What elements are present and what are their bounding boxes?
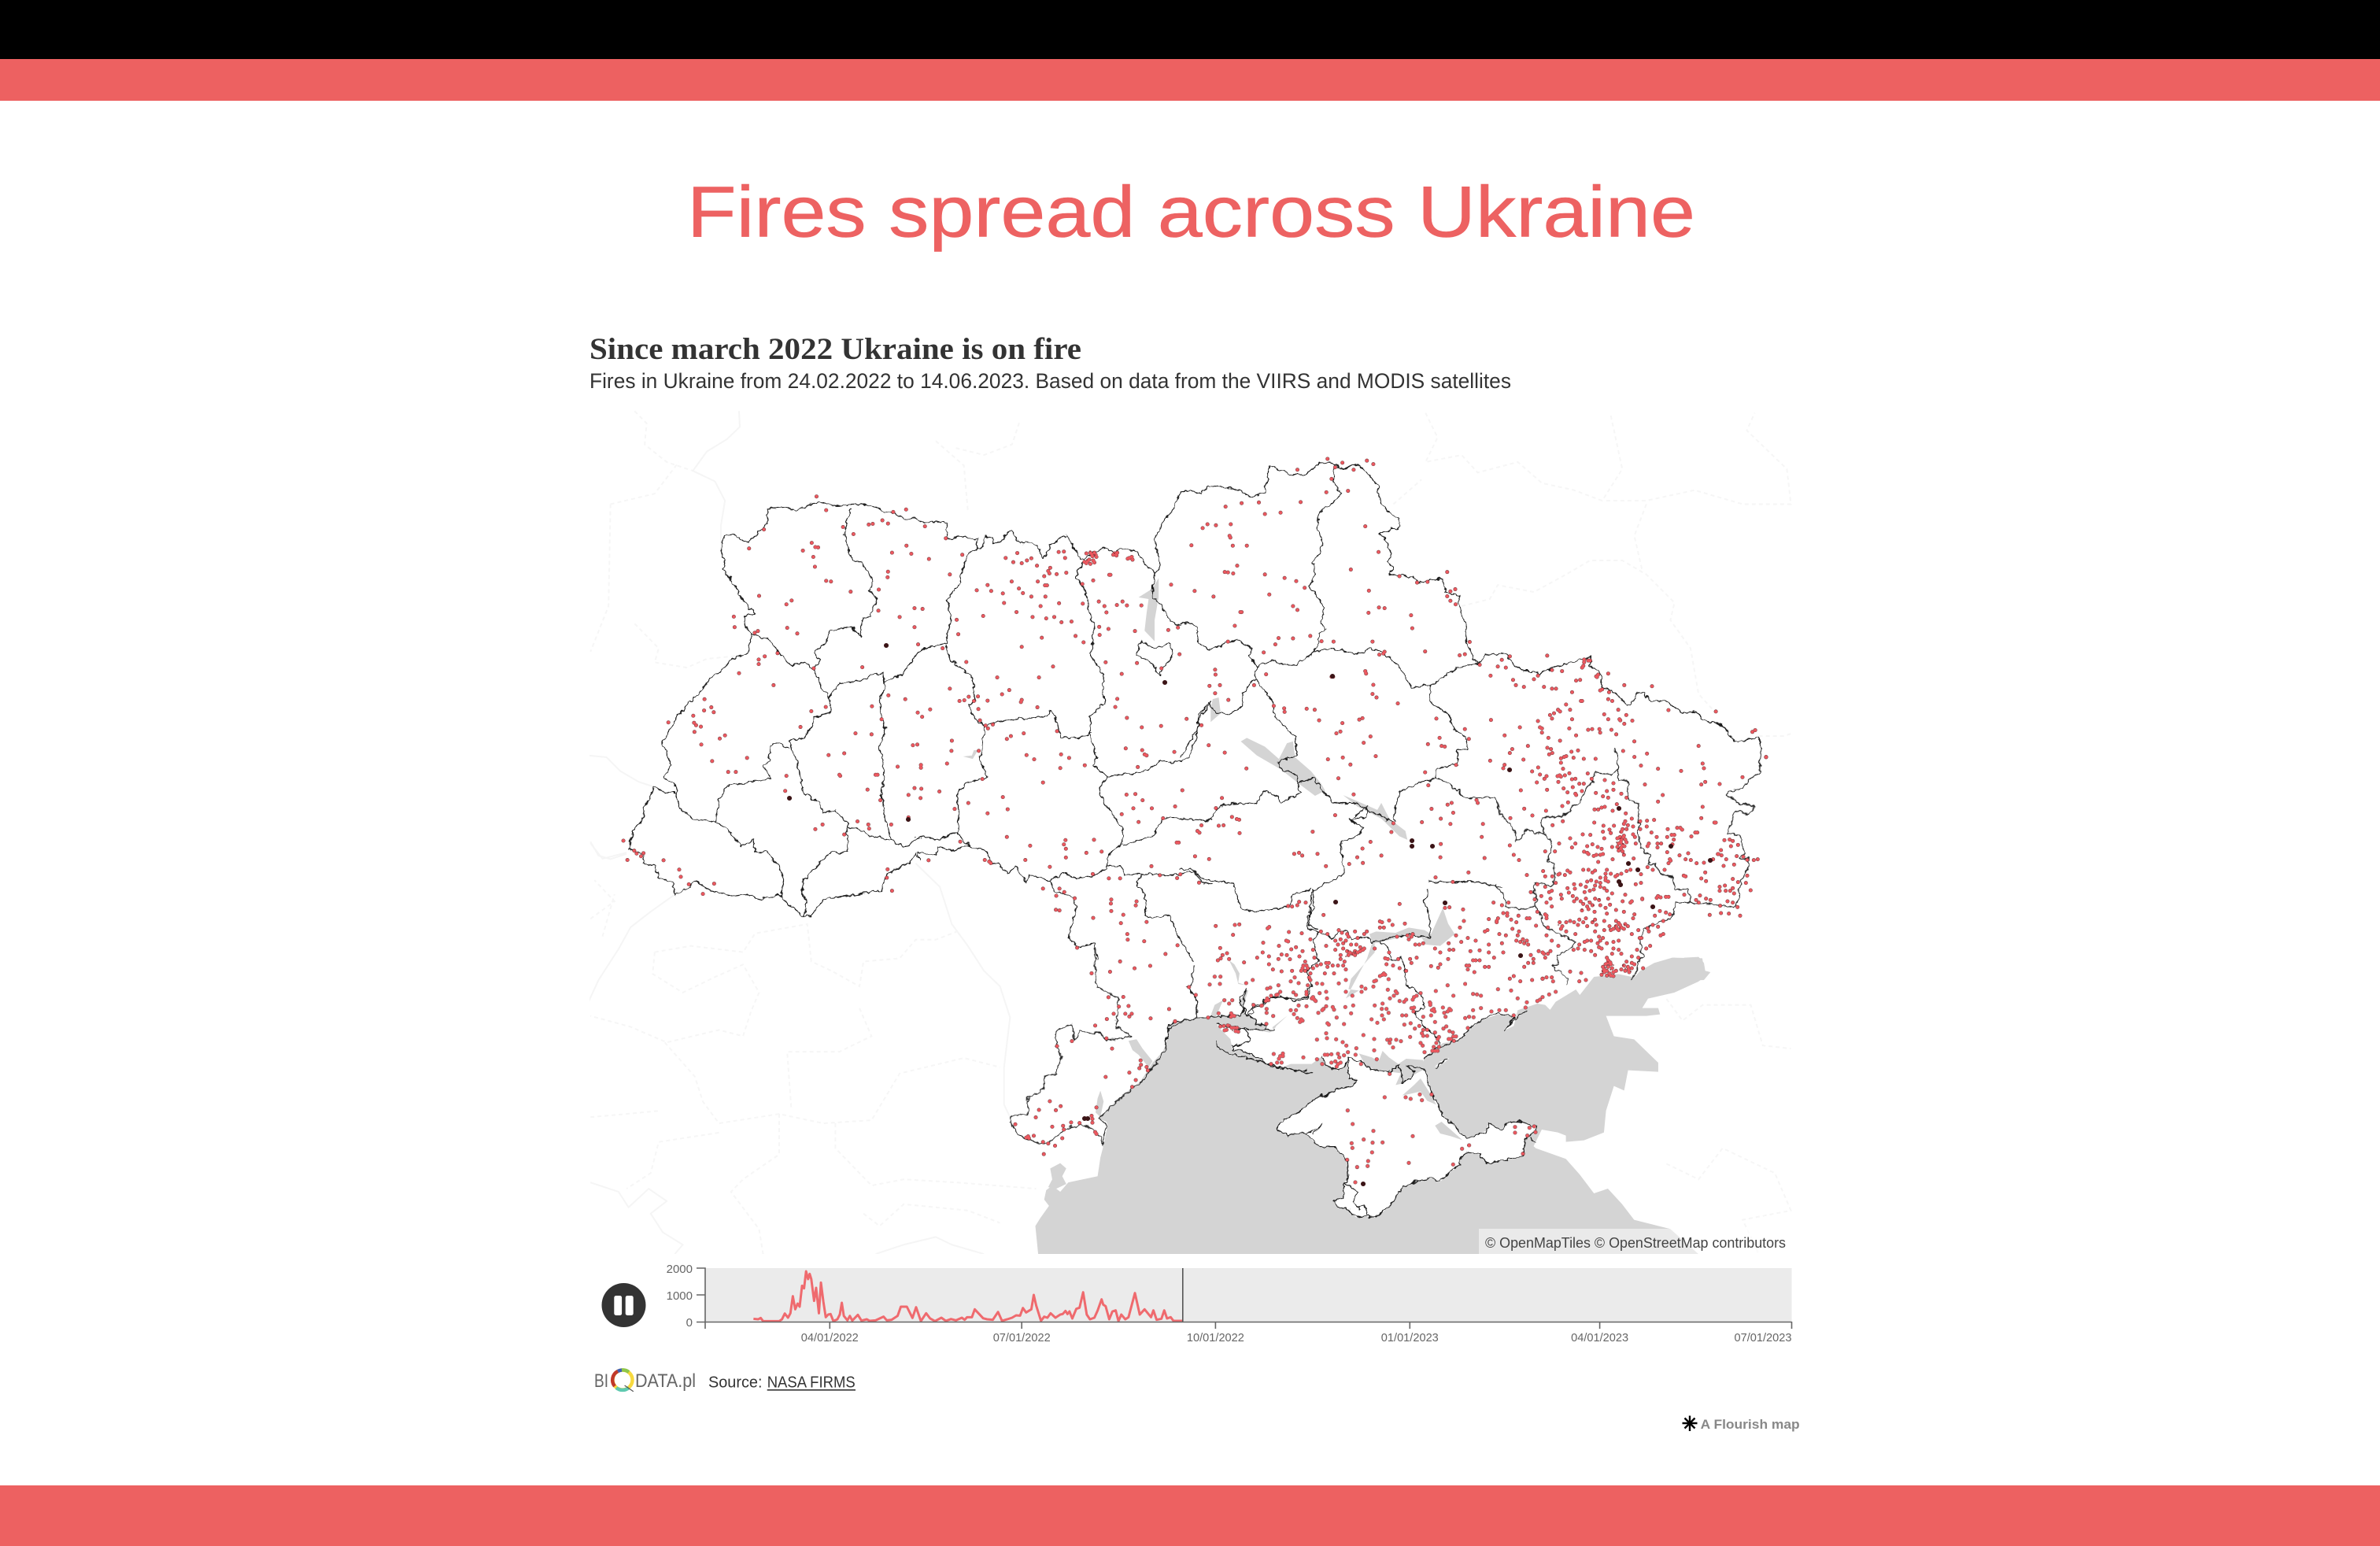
source note [708, 1374, 856, 1392]
reservoirs and lakes [963, 578, 1710, 1189]
pause button [601, 1283, 645, 1327]
BIQDATA logo: BI [594, 1370, 608, 1392]
x axis labels [801, 1331, 1791, 1344]
x axis labels: 07/01/2022 [993, 1331, 1051, 1344]
Flourish credit: A Flourish map [1701, 1417, 1800, 1432]
fire count line [753, 1271, 1183, 1321]
timeline chart [667, 1263, 1791, 1344]
current-time marker [1182, 1268, 1184, 1322]
source note: NASA FIRMS [767, 1374, 856, 1392]
x axis labels: 04/01/2022 [801, 1331, 859, 1344]
top red band [0, 59, 2380, 101]
x axis labels: 10/01/2022 [1187, 1331, 1244, 1344]
y axis labels: 0 [686, 1316, 693, 1330]
chart heading: Since march 2022 Ukraine is on fire [589, 332, 1081, 366]
faint neighbouring-country borders [589, 411, 1795, 1254]
map of Ukraine with fire points [589, 411, 1795, 1254]
y axis labels: 2000 [667, 1263, 693, 1276]
x axis labels: 07/01/2023 [1735, 1331, 1791, 1344]
BIQDATA logo [594, 1370, 696, 1392]
y axis labels: 1000 [667, 1289, 693, 1303]
dark overlap flecks in dense clusters [1087, 551, 1631, 1030]
y axis labels [667, 1263, 693, 1330]
x axis labels: 01/01/2023 [1381, 1331, 1439, 1344]
BIQDATA logo: DATA.pl [635, 1370, 696, 1392]
chart subtitle: Fires in Ukraine from 24.02.2022 to 14.06.2023. Based on data from the VIIRS and MODIS satellites [589, 369, 1511, 393]
title: Fires spread across Ukraine [687, 172, 1695, 252]
chart axes [697, 1268, 1791, 1329]
map attribution: © OpenMapTiles © OpenStreetMap contributors [1485, 1235, 1786, 1251]
source note: Source: [708, 1374, 762, 1392]
top black band [0, 0, 2380, 59]
Black Sea and Sea of Azov [1036, 958, 1709, 1254]
fire points [623, 459, 1766, 1184]
oblast and national borders [629, 462, 1762, 1218]
bottom red band [0, 1485, 2380, 1546]
x axis labels: 04/01/2023 [1571, 1331, 1628, 1344]
map attribution [1479, 1229, 1792, 1254]
darkest repeat-burn points [789, 645, 1710, 1184]
